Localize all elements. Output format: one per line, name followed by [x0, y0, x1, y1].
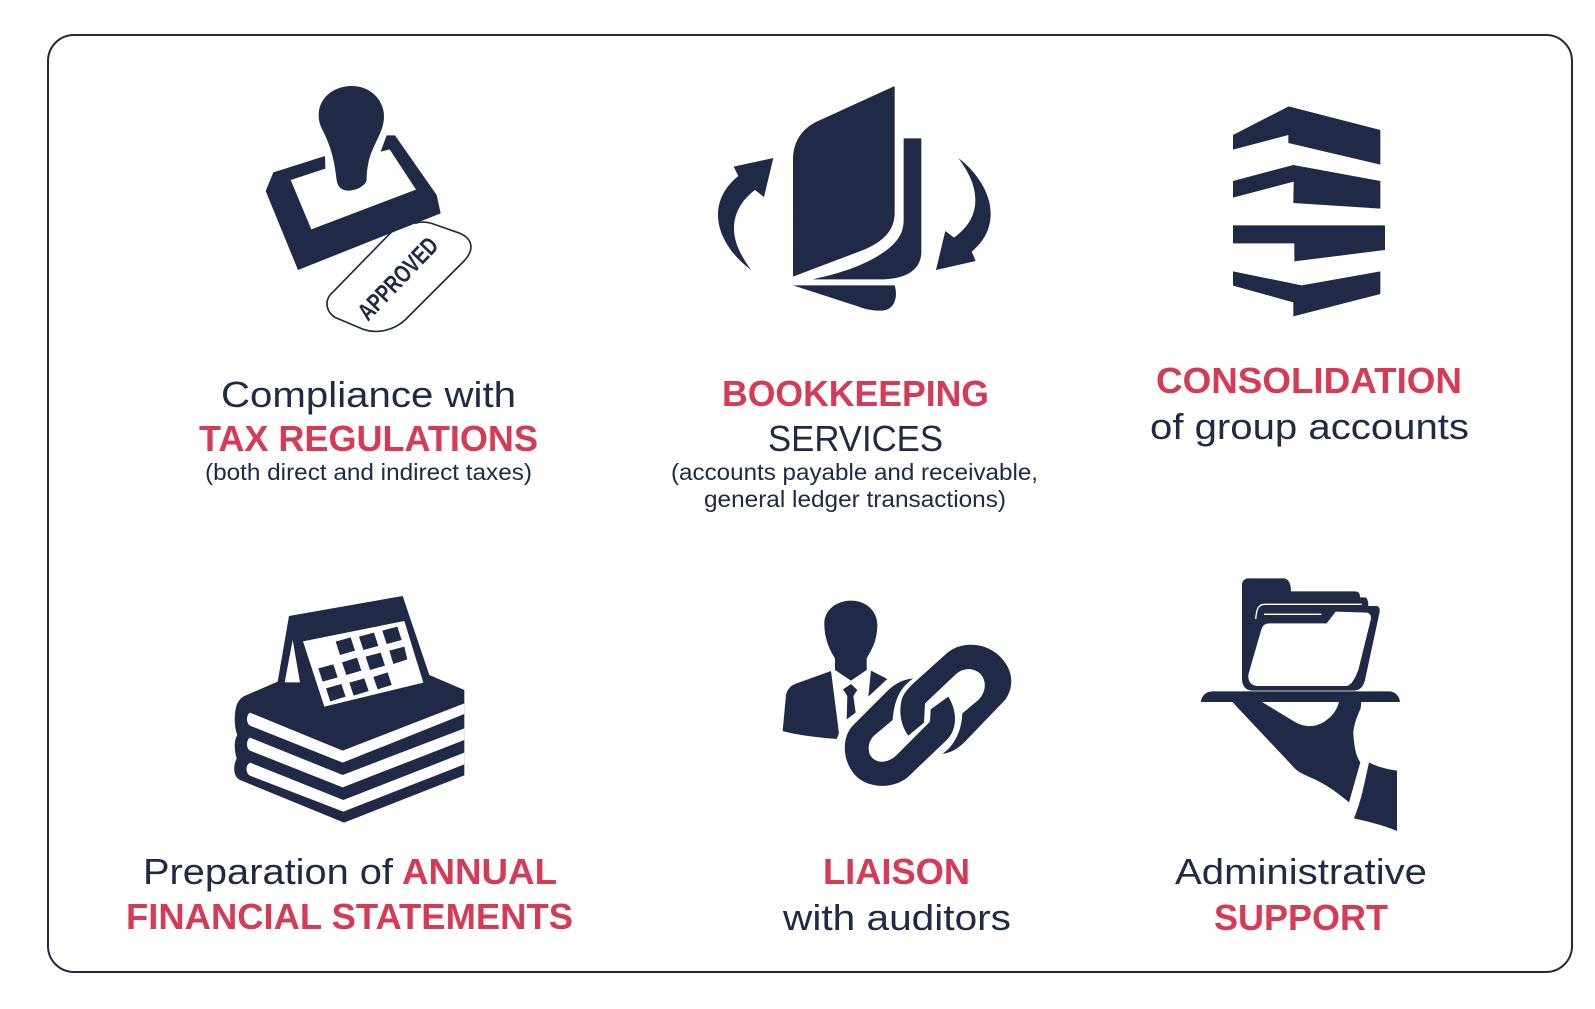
heading: liaison with auditors: LIAISON — [823, 851, 970, 892]
icon: approval stamp: APPROVED — [353, 232, 444, 326]
heading: preparation of annual financial statements: FINANCIAL STATEMENTS — [126, 896, 573, 937]
heading: liaison with auditors — [782, 851, 1011, 938]
heading: consolidation of group accounts — [1150, 360, 1469, 447]
icon: book with arrows — [718, 86, 991, 311]
icon: folder on tray held by hand — [1201, 578, 1400, 831]
panel: tax compliance — [199, 86, 538, 485]
heading: bookkeeping services: (accounts payable and receivable, — [671, 459, 1038, 485]
heading: preparation of annual financial statements: Preparation of — [143, 851, 394, 892]
icon: approval stamp — [266, 86, 471, 331]
heading: bookkeeping services: general ledger transactions) — [704, 486, 1006, 512]
panel: liaison with auditors — [782, 601, 1011, 938]
heading: compliance with tax regulations — [199, 374, 538, 485]
heading: bookkeeping services: SERVICES — [768, 418, 943, 459]
heading: consolidation of group accounts: of group accounts — [1150, 406, 1469, 447]
heading: bookkeeping services: BOOKKEEPING — [722, 373, 989, 414]
heading: liaison with auditors: with auditors — [782, 897, 1011, 938]
heading: administrative support — [1175, 851, 1427, 938]
panel: annual financial statements — [126, 596, 573, 937]
heading: preparation of annual financial statements: ANNUAL — [402, 851, 557, 892]
panel: consolidation — [1150, 106, 1469, 447]
heading: compliance with tax regulations: (both direct and indirect taxes) — [205, 459, 532, 485]
heading: compliance with tax regulations: Compliance with — [221, 374, 516, 415]
heading: bookkeeping services — [671, 373, 1038, 512]
icon: stacked layers — [1233, 106, 1385, 316]
icon: books and calendar — [234, 596, 464, 823]
panel: bookkeeping — [671, 86, 1038, 512]
heading: preparation of annual financial statements — [126, 851, 573, 937]
icon: person and chain link — [783, 601, 1011, 786]
panel: administrative support — [1175, 578, 1427, 938]
heading: administrative support: Administrative — [1175, 851, 1427, 892]
heading: consolidation of group accounts: CONSOLIDATION — [1156, 360, 1462, 401]
heading: compliance with tax regulations: TAX REGULATIONS — [199, 418, 538, 459]
heading: administrative support: SUPPORT — [1214, 897, 1388, 938]
